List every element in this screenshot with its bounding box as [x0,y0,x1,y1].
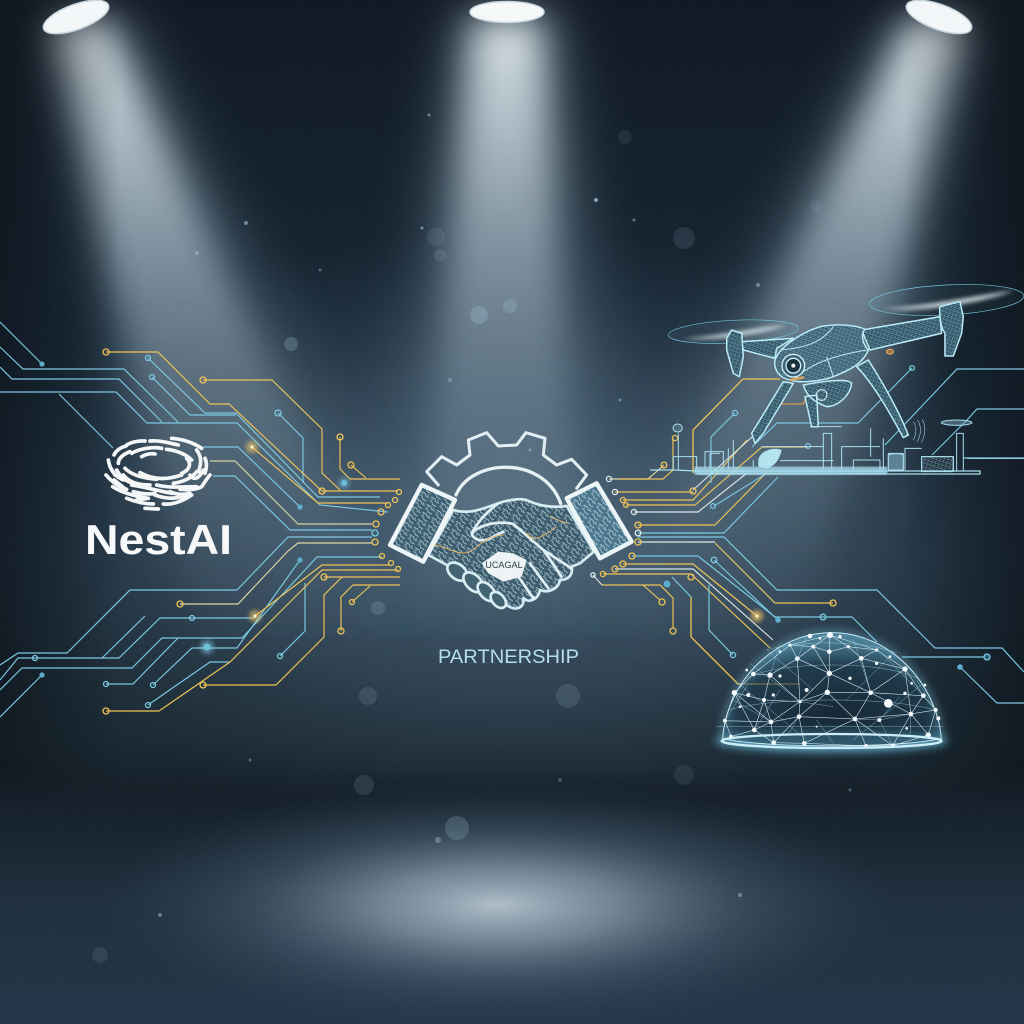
spotlight lamp: center [470,2,544,22]
pale traces right [593,437,773,640]
gear outline [427,433,587,488]
brand name: NestAI [85,516,232,563]
network dome [715,632,948,752]
trace glow sparks [200,441,763,654]
icon: nest [106,438,210,509]
trace end rings right [591,366,990,670]
rotors [668,281,1024,346]
clasped hands [428,499,594,611]
spotlight lamp: left [39,0,113,41]
yellow traces right [602,379,833,684]
spotlight beams [40,10,985,660]
dome shell [723,633,941,746]
drone camera [782,349,893,400]
stage floor [0,770,1024,1024]
dome glow [715,633,948,752]
right cuff [567,483,632,558]
left cuff [390,485,455,562]
center label [482,552,527,582]
dome mesh lines [725,635,936,746]
gear inner arc [456,467,561,503]
partnership label: PARTNERSHIP [438,647,579,668]
right circuit traces [591,366,1024,703]
drone frame [727,302,963,443]
blue traces left [0,322,388,717]
dome nodes [723,632,940,748]
left circuit traces [0,322,402,717]
center label: UCAGAL [485,560,523,570]
handshake and gear icon [390,433,632,611]
blue traces right [632,368,1024,703]
floating bokeh particles [92,114,852,963]
city skyline platform [650,419,1024,474]
NestAI logo [85,438,232,563]
yellow traces left [106,352,400,711]
dome base ring [722,734,942,748]
trace end rings left [32,349,402,714]
spotlight lamp: right [902,0,976,41]
drone with infrastructure [650,281,1024,474]
